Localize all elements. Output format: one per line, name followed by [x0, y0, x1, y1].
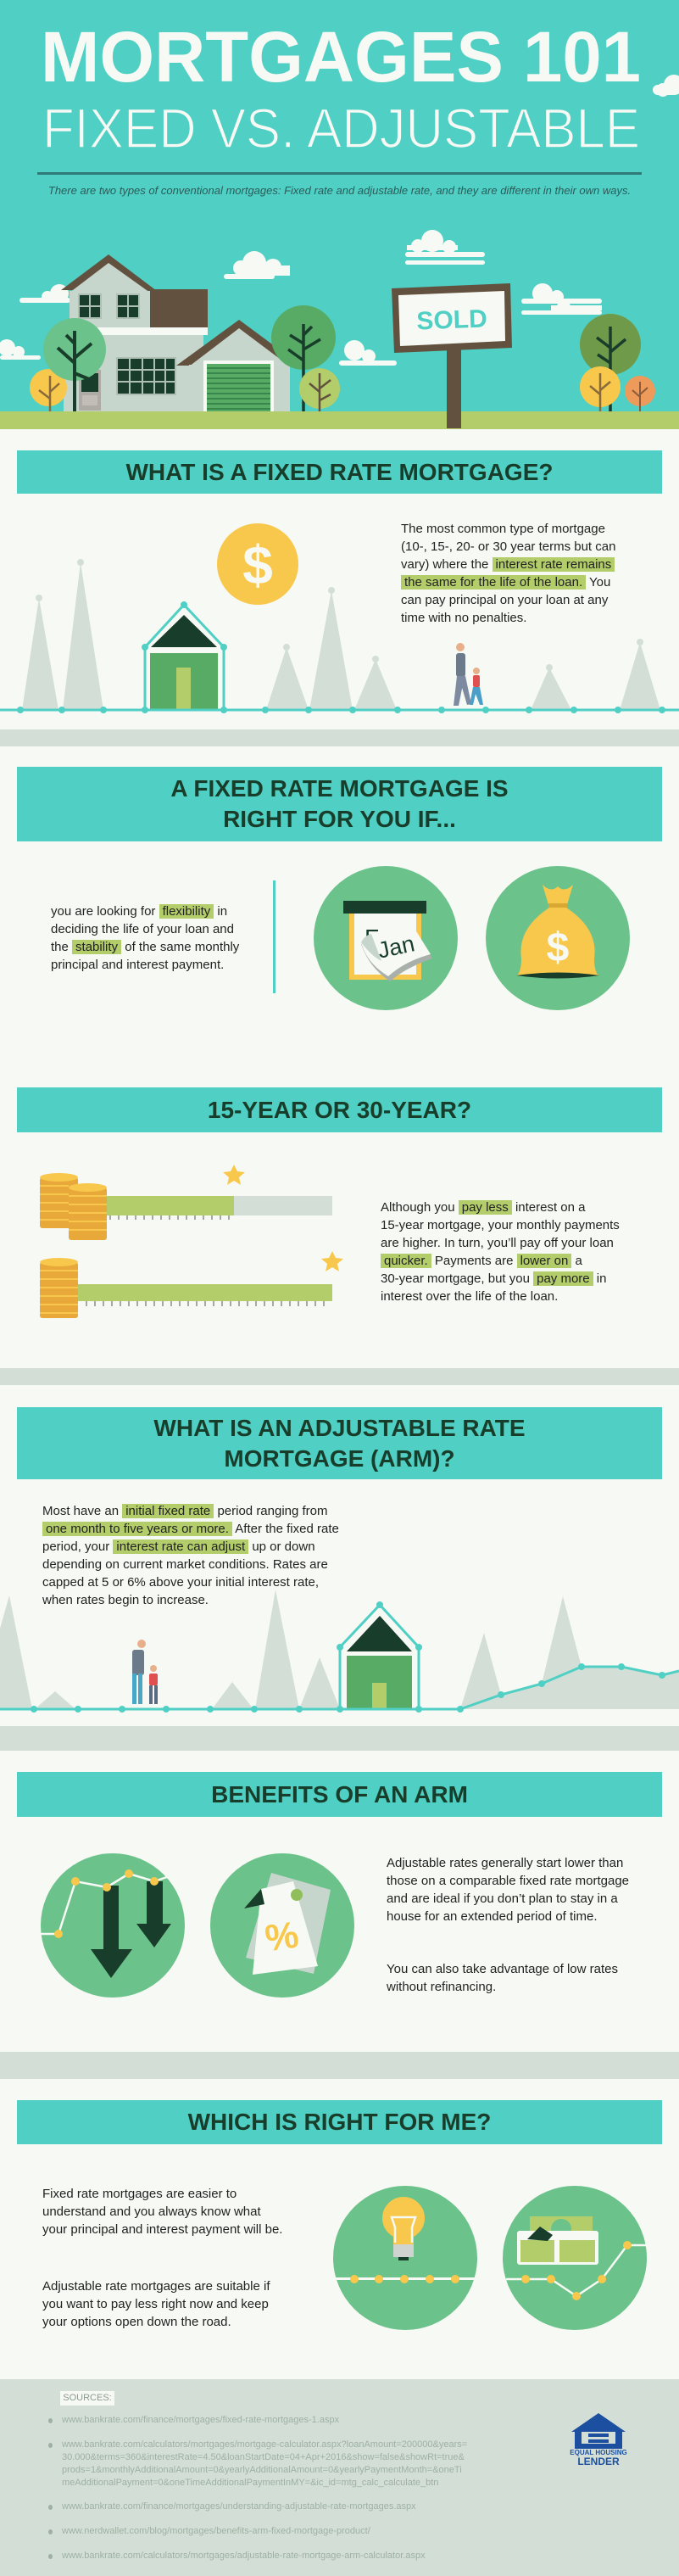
- source list: www.bankrate.com/calculators/mortgages/adjustable-rate-mortgage-arm-calculator.aspx: [62, 2551, 426, 2561]
- icon: falling arrows: [41, 1853, 185, 1998]
- which text: understand and you always know what: [42, 2204, 261, 2219]
- ARM text: [42, 1504, 339, 1607]
- intro text: There are two types of conventional mortgages: Fixed rate and adjustable rate, and they are different in their own ways.: [48, 184, 631, 197]
- which text: Fixed rate mortgages are easier to: [42, 2187, 237, 2201]
- benefits text: Adjustable rates generally start lower than: [387, 1856, 623, 1870]
- garage: [176, 320, 301, 411]
- source list: www.nerdwallet.com/blog/mortgages/benefits-arm-fixed-mortgage-product/: [62, 2526, 370, 2536]
- icon: calendar: [314, 866, 458, 1010]
- trees: [30, 305, 655, 411]
- header: ARM: MORTGAGE (ARM)?: [224, 1445, 455, 1471]
- clouds: [0, 75, 679, 366]
- 15/30 text: 15-year mortgage, your monthly payments: [381, 1218, 620, 1232]
- 15/30 text: [381, 1200, 620, 1304]
- header: which is right: WHICH IS RIGHT FOR ME?: [188, 2109, 491, 2135]
- sources label: [60, 2391, 114, 2406]
- fixed rate text: [401, 522, 615, 625]
- which icons: [333, 2186, 647, 2330]
- fixed rate text: vary) where the interest rate remains: [401, 557, 611, 572]
- sources panel: [0, 2379, 679, 2576]
- source list: 30.000&terms=360&interestRate=4.50&loanStartDate=04+Apr+2016&show=false&showRt=true&: [62, 2452, 465, 2462]
- header: right for you: A FIXED RATE MORTGAGE IS: [170, 775, 509, 802]
- icon: money bag: $: [547, 925, 570, 970]
- source list: www.bankrate.com/finance/mortgages/understanding-adjustable-rate-mortgages.aspx: [62, 2501, 416, 2512]
- 15/30 text: are higher. In turn, you’ll pay off your loan: [381, 1236, 614, 1250]
- header: benefits: BENEFITS OF AN ARM: [211, 1781, 468, 1807]
- benefits text: house for an extended period of time.: [387, 1909, 597, 1924]
- sold sign: SOLD: [416, 305, 487, 335]
- 15/30 text: quicker. Payments are lower on a: [384, 1254, 582, 1268]
- stars: [223, 1165, 245, 1185]
- header: fixed rate: [17, 450, 662, 494]
- equal housing logo: [570, 2413, 627, 2467]
- ARM text: depending on current market conditions. Rates are: [42, 1557, 328, 1572]
- benefits icons: [41, 1853, 354, 1998]
- sold sign: [392, 283, 512, 428]
- hero ground: [0, 411, 679, 429]
- which text: your principal and interest payment will be.: [42, 2222, 282, 2237]
- equal housing logo: LENDER: [577, 2456, 620, 2467]
- ARM text: capped at 5 or 6% above your initial interest rate,: [42, 1575, 319, 1590]
- icon: money bag: [486, 866, 630, 1010]
- header: benefits: [17, 1772, 662, 1817]
- header: 15 or 30: [17, 1087, 662, 1132]
- text: without refinancing.: [387, 1980, 496, 1994]
- hero illustration: [0, 75, 679, 428]
- hero background: [0, 0, 679, 411]
- right for you text: deciding the life of your loan and: [51, 922, 234, 936]
- coin stacks: [40, 1173, 107, 1318]
- icon: dollar coin: $: [242, 534, 273, 595]
- big house: [61, 254, 208, 411]
- header: 15 or 30: 15-YEAR OR 30-YEAR?: [208, 1096, 471, 1123]
- ARM text: Most have an initial fixed rate period ranging from: [42, 1504, 328, 1518]
- fixed rate text: (10-, 15-, 20- or 30 year terms but can: [401, 539, 615, 554]
- bar comparison chart: [40, 1165, 343, 1318]
- title: MORTGAGES 101: [41, 17, 641, 97]
- header: ARM: WHAT IS AN ADJUSTABLE RATE: [153, 1415, 526, 1440]
- icon: calendar: Jan: [376, 930, 417, 964]
- fixed rate text: the same for the life of the loan. You: [404, 575, 610, 590]
- equal housing logo: EQUAL HOUSING: [570, 2449, 627, 2456]
- source list: www.bankrate.com/calculators/mortgages/mortgage-calculator.aspx?loanAmount=200000&years=: [62, 2439, 467, 2450]
- header: which is right: [17, 2100, 662, 2144]
- source list: meAdditionalPayment=0&oneTimeAdditionalPaymentInMY=&ic_id=mtg_calc_calculate_btn: [62, 2478, 438, 2488]
- icon: calendar: Feb: [365, 925, 405, 951]
- source list: prods=1&monthlyAdditionalAmount=0&yearlyAdditionalAmount=0&yearlyPaymentMonth=&oneTi: [62, 2465, 462, 2475]
- header: fixed rate: WHAT IS A FIXED RATE MORTGAGE?: [125, 458, 553, 485]
- ARM text: one month to five years or more. After the fixed rate: [46, 1522, 339, 1536]
- right for you text: [51, 904, 239, 972]
- which text: [42, 2187, 282, 2237]
- ARM text: period, your interest rate can adjust up or down: [42, 1539, 315, 1554]
- title block: [41, 17, 641, 159]
- people walking: [454, 643, 483, 706]
- text: Adjustable rate mortgages are suitable if: [42, 2279, 270, 2294]
- 15/30 text: interest over the life of the loan.: [381, 1289, 558, 1304]
- right for you text: you are looking for flexibility in: [51, 904, 227, 919]
- fixed rate scene: [0, 523, 679, 713]
- icon: wallet: [503, 2186, 647, 2330]
- ARM text: when rates begin to increase.: [42, 1593, 209, 1607]
- source list: www.bankrate.com/finance/mortgages/fixed-rate-mortgages-1.aspx: [62, 2415, 339, 2425]
- benefits text: and are ideal if you don’t plan to stay in a: [387, 1891, 618, 1906]
- rising rate line: [0, 1663, 679, 1713]
- ARM scene: [0, 1590, 679, 1713]
- icons: calendar and money bag: [314, 866, 630, 1010]
- 15/30 text: 30-year mortgage, but you pay more in: [381, 1271, 606, 1286]
- subtitle: FIXED VS. ADJUSTABLE: [42, 97, 640, 159]
- house on line: [337, 1601, 422, 1709]
- sources label: SOURCES:: [63, 2393, 112, 2403]
- benefits text: [387, 1856, 629, 1924]
- text: you want to pay less right now and keep: [42, 2297, 269, 2311]
- fixed rate text: The most common type of mortgage: [401, 522, 605, 536]
- 15/30 text: Although you pay less interest on a: [381, 1200, 585, 1215]
- icon: light bulb: [333, 2186, 477, 2330]
- right for you text: the stability of the same monthly: [51, 940, 239, 954]
- icon: percent document: [210, 1853, 354, 1998]
- house on line: [142, 601, 227, 710]
- ground line: [0, 707, 679, 713]
- icon: percent document: %: [263, 1914, 301, 1959]
- header: right for you: RIGHT FOR YOU IF...: [223, 806, 456, 832]
- right for you text: principal and interest payment.: [51, 958, 224, 972]
- people standing: [132, 1640, 158, 1704]
- fixed rate text: time with no penalties.: [401, 611, 526, 625]
- header: right for you: [17, 767, 662, 841]
- icon: dollar coin: [217, 523, 298, 605]
- header: ARM: [17, 1407, 662, 1479]
- text: You can also take advantage of low rates: [387, 1962, 618, 1976]
- benefits text: those on a comparable fixed rate mortgage: [387, 1874, 629, 1888]
- source list: [48, 2415, 467, 2561]
- fixed rate text: can pay principal on your loan at any: [401, 593, 608, 607]
- text: your options open down the road.: [42, 2315, 231, 2329]
